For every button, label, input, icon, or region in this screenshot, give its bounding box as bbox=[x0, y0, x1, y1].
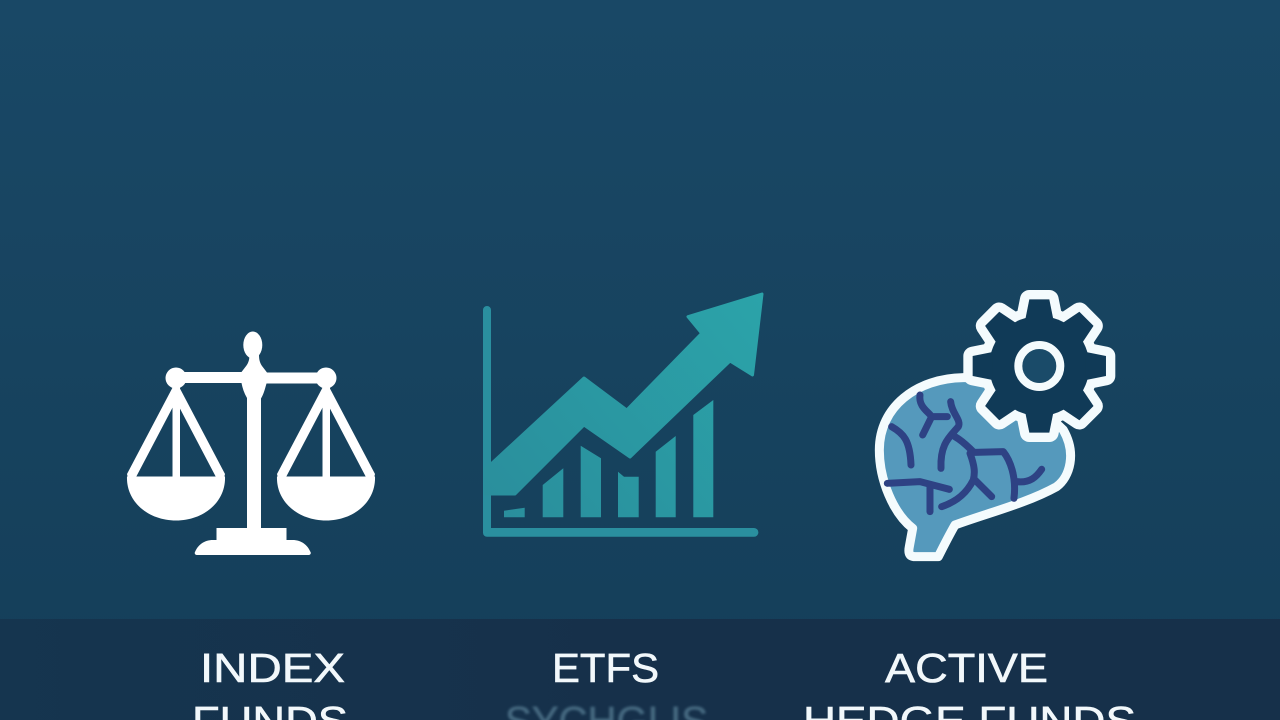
rising arrow bbox=[485, 294, 762, 494]
gear body bbox=[973, 299, 1106, 433]
gear hub bbox=[1018, 345, 1060, 387]
gear outline bbox=[973, 299, 1106, 433]
right pan bbox=[277, 368, 375, 520]
label: index funds: INDEX bbox=[200, 645, 345, 691]
gear bbox=[973, 299, 1106, 433]
scale post and beam bbox=[176, 354, 325, 530]
label: active hedge funds: ACTIVE bbox=[885, 645, 1048, 691]
brain veins bbox=[887, 395, 1042, 512]
bars bbox=[504, 400, 713, 517]
left pan bbox=[127, 368, 225, 520]
label band bbox=[0, 619, 1280, 720]
label: etfs: ETFS bbox=[552, 645, 659, 691]
label: active hedge funds bbox=[803, 645, 1136, 720]
icon: brain with gear bbox=[879, 299, 1106, 557]
label: index funds bbox=[192, 645, 348, 720]
icon: rising chart with arrow bbox=[483, 294, 762, 537]
label: etfs bbox=[505, 645, 708, 720]
scale head bbox=[243, 332, 262, 358]
chart axes bbox=[483, 306, 758, 537]
brain bbox=[879, 378, 1071, 557]
icon: balance scales bbox=[127, 332, 375, 555]
scale base bbox=[195, 528, 311, 555]
